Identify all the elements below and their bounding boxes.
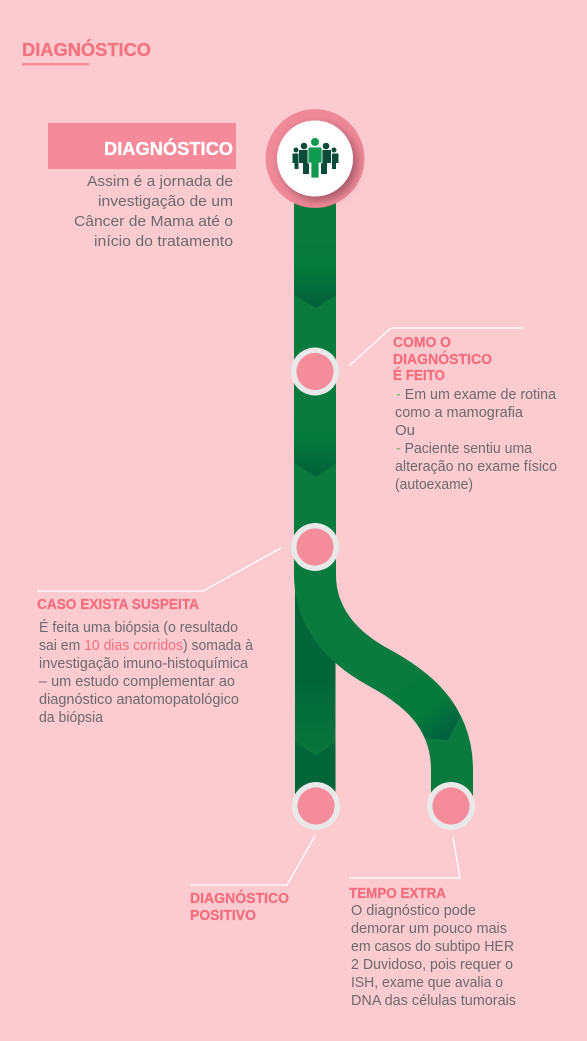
callout: caso exista suspeita: – um estudo complementar ao [39, 673, 235, 690]
intro text: Câncer de Mama até o [74, 213, 233, 230]
callout: tempo extra: em casos do subtipo HER [351, 938, 514, 955]
callout: caso exista suspeita: CASO EXISTA SUSPEITA [37, 597, 199, 613]
callout: tempo extra: TEMPO EXTRA [349, 886, 446, 902]
callout: caso exista suspeita [37, 597, 254, 726]
callout: tempo extra: DNA das células tumorais [351, 992, 516, 1009]
callout: como o diagnóstico é feito: - Paciente sentiu uma [396, 440, 533, 457]
callout: diagnóstico positivo: DIAGNÓSTICO [190, 889, 289, 907]
intro text: Assim é a jornada de [87, 173, 233, 190]
node 2 [291, 523, 339, 571]
callout: diagnóstico positivo [190, 889, 289, 924]
header banner [48, 123, 236, 169]
node 3 [292, 782, 340, 830]
callout line 3 [190, 836, 315, 885]
dark branch: positive diagnosis [295, 575, 336, 806]
callout: diagnóstico positivo: POSITIVO [190, 908, 256, 924]
main trunk and curved branch [315, 190, 452, 806]
callout: caso exista suspeita: da biópsia [39, 709, 104, 726]
chevron on dark branch [295, 680, 336, 756]
callout line 1 [349, 328, 524, 366]
callout: caso exista suspeita: sai em 10 dias corridos) somada à [39, 637, 254, 654]
callout line 2 [37, 548, 281, 591]
callout: como o diagnóstico é feito: - Em um exame de rotina [396, 386, 557, 403]
intro text: investigação de um [98, 193, 233, 210]
callout line 4 [349, 837, 460, 878]
chevron 1 [294, 240, 336, 308]
callout: caso exista suspeita: diagnóstico anatomopatológico [39, 691, 239, 708]
chevron 2 [294, 411, 336, 477]
icon medallion: group of people [266, 109, 364, 208]
callout: tempo extra: ISH, exame que avalia o [351, 974, 503, 991]
header banner: DIAGNÓSTICO [104, 138, 233, 159]
callout: como o diagnóstico é feito: Ou [395, 422, 415, 439]
intro text: início do tratamento [94, 233, 233, 250]
chevron on curved branch [390, 672, 460, 740]
callout: tempo extra: O diagnóstico pode [351, 902, 476, 919]
callout: como o diagnóstico é feito: alteração no exame físico [395, 458, 557, 475]
callout: como o diagnóstico é feito: (autoexame) [395, 476, 473, 493]
callout: como o diagnóstico é feito: como a mamografia [395, 404, 524, 421]
callout: como o diagnóstico é feito: COMO O [393, 335, 451, 351]
node 1 [291, 348, 339, 396]
journey track [294, 190, 460, 806]
intro text [74, 173, 233, 250]
center figure [308, 138, 322, 178]
callout: como o diagnóstico é feito [393, 335, 557, 493]
callout: como o diagnóstico é feito: É FEITO [393, 367, 445, 384]
callout: tempo extra [349, 886, 516, 1009]
callout: como o diagnóstico é feito: DIAGNÓSTICO [393, 350, 492, 368]
node 4 [427, 782, 475, 830]
small figures [292, 143, 338, 174]
page title: DIAGNÓSTICO [22, 39, 151, 60]
callout: tempo extra: demorar um pouco mais [351, 920, 507, 937]
callout: tempo extra: 2 Duvidoso, pois requer o [351, 956, 513, 973]
callout: caso exista suspeita: É feita uma biópsia (o resultado [39, 619, 238, 636]
callout: caso exista suspeita: investigação imuno-histoquímica [39, 655, 249, 672]
